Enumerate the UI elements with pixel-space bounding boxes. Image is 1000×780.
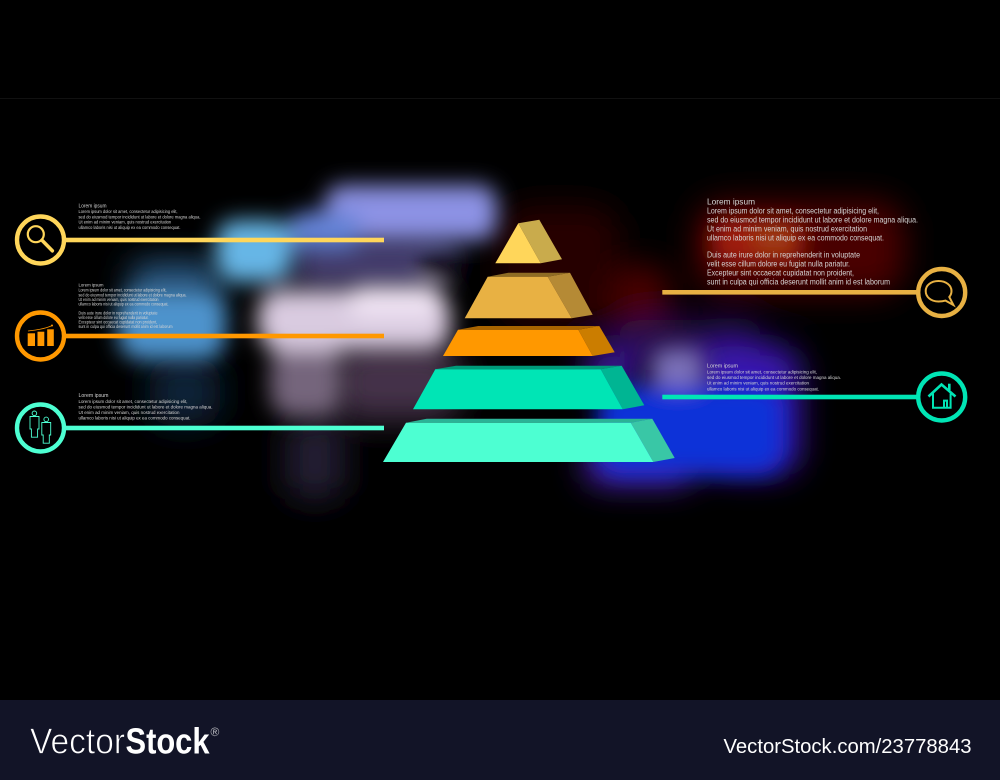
- tier 3: [443, 326, 615, 356]
- text block: Ut enim ad minim veniam, quis nostrud exercitation: [78, 220, 172, 225]
- callout 4: speech bubble: [662, 197, 965, 316]
- text block: sed do eiusmod tempor incididunt ut labore et dolore magna aliqua.: [78, 405, 212, 411]
- text block: Ut enim ad minim veniam, quis nostrud exercitation: [78, 410, 180, 416]
- text block: ullamco laboris nisi ut aliquip ex ea commodo consequat.: [707, 233, 884, 242]
- logo wordmark: Stock: [126, 720, 210, 762]
- tier 2: [465, 273, 593, 318]
- text block: Duis aute irure dolor in reprehenderit in voluptate: [707, 251, 860, 260]
- icon ring: [918, 269, 965, 316]
- text block: Lorem ipsum: [707, 197, 755, 207]
- tier 4: [413, 366, 644, 409]
- text block: sed do eiusmod tempor incididunt ut labore et dolore magna aliqua.: [707, 216, 918, 225]
- text block: sunt in culpa qui officia deserunt mollit anim id est laborum: [707, 278, 890, 287]
- connector line: [662, 290, 918, 295]
- pyramid: [383, 220, 675, 462]
- text block: ullamco laboris nisi ut aliquip ex ea commodo consequat.: [78, 416, 190, 422]
- text block: ullamco laboris nisi ut aliquip ex ea commodo consequat.: [78, 301, 168, 306]
- text block: Excepteur sint occaecat cupidatat non proident,: [707, 269, 854, 278]
- text block: [78, 393, 212, 422]
- text block: [707, 363, 841, 392]
- text block: sed do eiusmod tempor incididunt ut labore et dolore magna aliqua.: [78, 214, 200, 219]
- text block: Ut enim ad minim veniam, quis nostrud exercitation: [78, 297, 159, 302]
- callout 1: search: [17, 204, 384, 264]
- callout 3: people: [17, 393, 384, 452]
- text block: Lorem ipsum dolor sit amet, consectetur adipisicing elit,: [78, 288, 166, 293]
- icon: house: [928, 384, 956, 408]
- connector line: [64, 334, 384, 338]
- text block: [78, 204, 200, 230]
- text block: Ut enim ad minim veniam, quis nostrud exercitation: [707, 381, 809, 387]
- text block: ullamco laboris nisi ut aliquip ex ea commodo consequat.: [707, 386, 819, 392]
- text block: ullamco laboris nisi ut aliquip ex ea commodo consequat.: [78, 225, 180, 230]
- text block: Lorem ipsum dolor sit amet, consectetur adipisicing elit,: [78, 209, 178, 214]
- icon ring: [17, 216, 64, 264]
- footer bar: [0, 700, 1000, 780]
- text block: sed do eiusmod tempor incididunt ut labore et dolore magna aliqua.: [78, 292, 186, 297]
- text block: Lorem ipsum: [78, 204, 106, 210]
- text block: Lorem ipsum: [78, 283, 104, 288]
- icon ring: [918, 374, 965, 420]
- text block: Lorem ipsum dolor sit amet, consectetur adipisicing elit,: [78, 399, 188, 405]
- image id: VectorStock.com/23778843: [724, 735, 972, 758]
- text block: sunt in culpa qui officia deserunt mollit anim id est laborum: [78, 324, 173, 329]
- text block: Lorem ipsum dolor sit amet, consectetur adipisicing elit,: [707, 207, 879, 216]
- blurred world map backdrop: [118, 185, 905, 500]
- text block: [78, 283, 186, 329]
- connector line: [662, 395, 918, 399]
- logo wordmark: [30, 720, 210, 762]
- logo wordmark: Vector: [30, 720, 125, 762]
- text block: sed do eiusmod tempor incididunt ut labore et dolore magna aliqua.: [707, 375, 841, 381]
- text block: Ut enim ad minim veniam, quis nostrud exercitation: [707, 224, 867, 234]
- connector line: [64, 426, 384, 430]
- callout 5: house: [662, 363, 965, 420]
- connector line: [64, 238, 384, 242]
- icon ring: [17, 312, 64, 360]
- tier 1: top: [495, 220, 562, 263]
- icon: bar chart: [28, 324, 54, 346]
- text block: [707, 197, 918, 287]
- text block: Excepteur sint occaecat cupidatat non proident,: [78, 320, 157, 325]
- icon: magnifier: [28, 226, 52, 251]
- callout 2: chart: [17, 283, 384, 360]
- icon: speech bubble: [926, 281, 953, 305]
- text block: Lorem ipsum: [707, 363, 738, 369]
- text block: Lorem ipsum dolor sit amet, consectetur adipisicing elit,: [707, 369, 817, 375]
- icon ring: [17, 404, 64, 452]
- text block: velit esse cillum dolore eu fugiat nulla pariatur.: [78, 315, 148, 320]
- text block: Duis aute irure dolor in reprehenderit in voluptate: [78, 310, 158, 315]
- text block: Lorem ipsum: [78, 393, 108, 399]
- tier 5: bottom: [383, 419, 675, 462]
- registered mark: ®: [210, 725, 220, 739]
- text block: velit esse cillum dolore eu fugiat nulla pariatur.: [707, 260, 850, 269]
- icon: two people: [30, 411, 51, 443]
